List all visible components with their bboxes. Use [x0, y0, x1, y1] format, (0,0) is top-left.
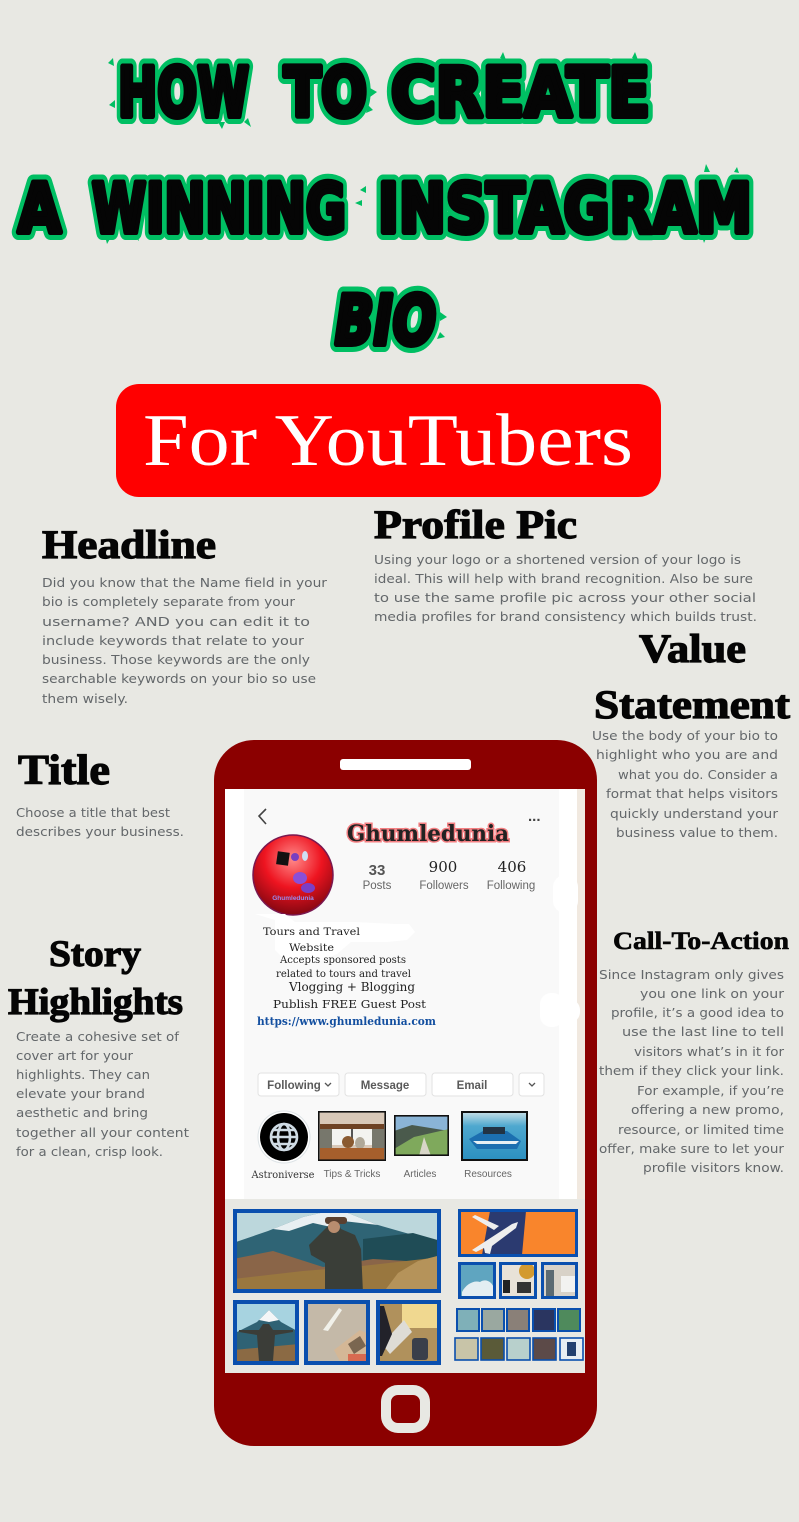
- home button: [386, 1390, 425, 1428]
- body: them wisely.: [42, 691, 128, 706]
- bio text: related to tours and travel: [276, 969, 411, 980]
- body: resource, or limited time: [618, 1122, 784, 1137]
- body: searchable keywords on your bio so use: [42, 671, 316, 686]
- photo: man and mountain: [233, 1209, 441, 1293]
- title outline: A: [18, 170, 61, 249]
- body: for a clean, crisp look.: [16, 1144, 163, 1159]
- stats: following: 406: [498, 858, 526, 876]
- highlight labels: Resources: [464, 1169, 512, 1180]
- body: Create a cohesive set of: [16, 1029, 180, 1044]
- body: offering a new promo,: [631, 1102, 784, 1117]
- title: [18, 52, 752, 361]
- body: together all your content: [16, 1125, 189, 1140]
- title fill: [18, 54, 752, 361]
- screen: [225, 789, 585, 1373]
- bio background patches: [255, 914, 415, 962]
- username: Ghumledunia: [347, 821, 509, 847]
- heading: Statement: [594, 682, 791, 727]
- photo: woman at building: [541, 1262, 578, 1299]
- body: to use the same profile pic across your other social: [374, 590, 756, 605]
- subtitle banner: [116, 384, 661, 497]
- highlight labels: Astroniverse: [251, 1170, 315, 1181]
- bio text: [257, 926, 436, 1028]
- action buttons: Message: [361, 1080, 409, 1092]
- stats: following: [487, 858, 535, 892]
- body: elevate your brand: [16, 1086, 145, 1101]
- thumbnails row 2: [455, 1338, 583, 1360]
- action buttons: Email: [457, 1080, 487, 1092]
- action buttons: Following: [267, 1080, 321, 1092]
- stats: following: Following: [487, 880, 535, 892]
- body: use the last line to tell: [622, 1024, 784, 1039]
- highlight: resources: [461, 1111, 528, 1161]
- section: profile pic: [374, 502, 757, 624]
- body: quickly understand your: [610, 806, 779, 821]
- profile header: [253, 808, 541, 915]
- heading: Value: [639, 626, 746, 671]
- title outline: WINNING: [92, 170, 346, 249]
- body: bio is completely separate from your: [42, 594, 296, 609]
- body: Did you know that the Name field in your: [42, 575, 328, 590]
- title fill: BIO: [335, 282, 436, 361]
- bio text: Accepts sponsored posts: [279, 955, 406, 966]
- body: profile, it’s a good idea to: [611, 1005, 784, 1020]
- body: [42, 575, 328, 706]
- highlight labels: [251, 1169, 512, 1181]
- bio text: Publish FREE Guest Post: [273, 997, 426, 1011]
- phone mockup: [214, 740, 597, 1446]
- photo: man arms open: [233, 1300, 299, 1365]
- title outline: TO: [284, 54, 367, 133]
- highlight labels: Articles: [404, 1169, 436, 1180]
- section: title: [16, 748, 184, 839]
- bio text: Website: [289, 942, 334, 954]
- heading: [594, 626, 791, 727]
- photo: airport: [376, 1300, 441, 1365]
- avatar: Ghumledunia: [272, 895, 314, 902]
- body: highlight who you are and: [596, 747, 778, 762]
- heading: [8, 934, 183, 1023]
- highlight: tips: [318, 1111, 386, 1161]
- body: profile visitors know.: [643, 1160, 784, 1175]
- body: describes your business.: [16, 824, 184, 839]
- highlight labels: Tips & Tricks: [324, 1169, 380, 1180]
- body: [16, 805, 184, 839]
- bio text: Vlogging + Blogging: [288, 980, 415, 994]
- heading: Title: [18, 748, 110, 794]
- body: [599, 967, 785, 1175]
- body: ideal. This will help with brand recognition. Also be sure: [374, 571, 753, 586]
- body: Using your logo or a shortened version of your logo is: [374, 552, 741, 567]
- bio text: Tours and Travel: [263, 926, 361, 938]
- body: visitors what’s in it for: [634, 1044, 785, 1059]
- avatar: [253, 835, 333, 915]
- subtitle banner: For YouTubers: [143, 400, 633, 482]
- photo: plane on orange: [458, 1209, 578, 1257]
- photo grid: right: [455, 1209, 583, 1360]
- stats: posts: 33: [369, 862, 385, 879]
- body: what you do. Consider a: [618, 767, 778, 782]
- stats: followers: [419, 858, 469, 892]
- body: Since Instagram only gives: [599, 967, 784, 982]
- title fill: CREATE: [391, 54, 650, 133]
- title fill: A: [18, 170, 61, 249]
- menu dots: ...: [528, 808, 541, 825]
- speaker: [340, 759, 471, 770]
- photo: flat lay: [499, 1262, 537, 1299]
- section: call-to-action: [599, 928, 789, 1175]
- highlight: articles: [394, 1115, 449, 1156]
- body: business value to them.: [616, 825, 778, 840]
- photo: map: [304, 1300, 370, 1365]
- photo: plane in sky: [458, 1262, 496, 1299]
- stats: followers: 900: [429, 858, 457, 876]
- phone body: [214, 740, 597, 1446]
- highlight: globe: [258, 1111, 310, 1163]
- title fill: WINNING: [92, 170, 346, 249]
- body: [16, 1029, 189, 1159]
- stats: posts: Posts: [363, 880, 392, 892]
- body: aesthetic and bring: [16, 1105, 148, 1120]
- title outline: BIO: [335, 282, 436, 361]
- body: cover art for your: [16, 1048, 134, 1063]
- body: them if they click your link.: [599, 1063, 784, 1078]
- body: Use the body of your bio to: [592, 728, 778, 743]
- body: For example, if you’re: [637, 1083, 784, 1098]
- heading: Story: [49, 934, 142, 975]
- title outline: [18, 52, 752, 361]
- heading: Headline: [42, 522, 216, 567]
- body: [592, 728, 779, 840]
- photo grid: left: [233, 1209, 441, 1365]
- title fill: HOW: [118, 54, 249, 133]
- body: offer, make sure to let your: [599, 1141, 785, 1156]
- thumbnails row 1: [457, 1309, 580, 1331]
- heading: Highlights: [8, 982, 183, 1023]
- body: format that helps visitors: [606, 786, 778, 801]
- heading: Profile Pic: [374, 502, 577, 547]
- section: headline: [42, 522, 328, 706]
- title outline: CREATE: [391, 54, 650, 133]
- heading: Call-To-Action: [613, 928, 789, 955]
- body: you one link on your: [640, 986, 785, 1001]
- title outline: HOW: [118, 54, 249, 133]
- body: Choose a title that best: [16, 805, 170, 820]
- stats: posts: [363, 862, 392, 892]
- bio text: https://www.ghumledunia.com: [257, 1014, 436, 1028]
- section: value statement: [592, 626, 791, 840]
- body: username? AND you can edit it to: [42, 614, 310, 629]
- body: include keywords that relate to your: [42, 633, 305, 648]
- stats: followers: Followers: [419, 880, 469, 892]
- story highlights row: [251, 1111, 528, 1181]
- title fill: TO: [284, 54, 367, 133]
- section: story highlights: [8, 934, 189, 1159]
- body: media profiles for brand consistency which builds trust.: [374, 609, 757, 624]
- action buttons: [258, 1073, 544, 1096]
- body: business. Those keywords are the only: [42, 652, 311, 667]
- body: [374, 552, 757, 624]
- back arrow: [259, 809, 266, 824]
- body: highlights. They can: [16, 1067, 150, 1082]
- white retouch patches on phone edge: [540, 875, 580, 1027]
